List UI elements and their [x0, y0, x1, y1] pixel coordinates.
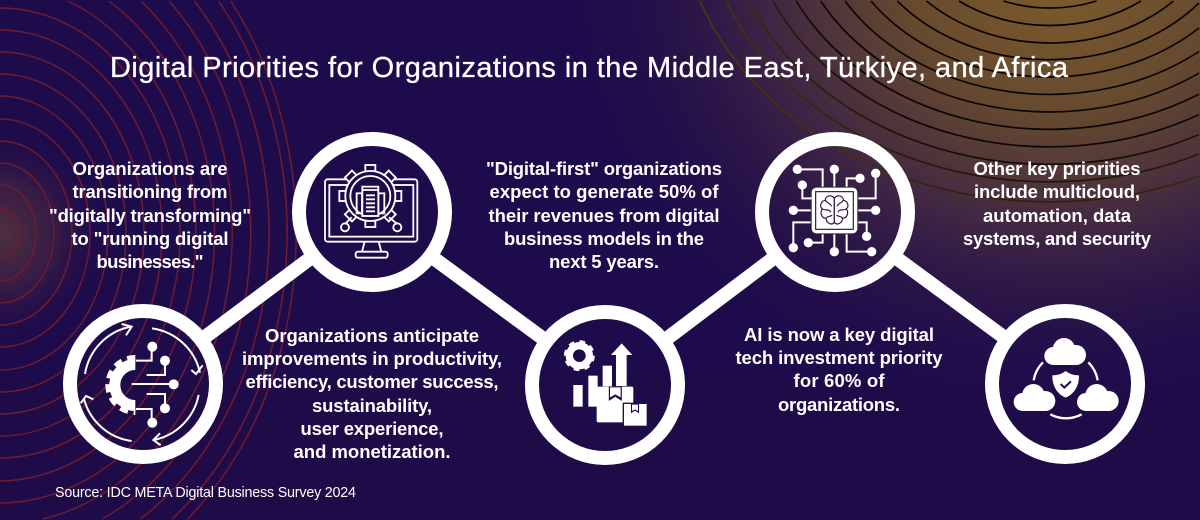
text: digital-first organizations: next 5 years.: [549, 251, 659, 272]
text: digital-first organizations: [486, 158, 722, 272]
icon: growth chart with gear and boxes: [565, 342, 648, 427]
text: AI investment priority: AI is now a key digital: [744, 324, 934, 345]
text: anticipated improvements: and monetization.: [294, 441, 450, 462]
source note: Source: IDC META Digital Business Survey 2024: [55, 485, 356, 501]
text: digital-first organizations: business models in the: [504, 228, 704, 249]
text: AI investment priority: tech investment priority: [736, 347, 943, 368]
text: AI investment priority: for 60% of: [794, 370, 885, 391]
text: anticipated improvements: sustainability,: [312, 395, 432, 416]
text: anticipated improvements: efficiency, customer success,: [246, 371, 498, 392]
text: anticipated improvements: improvements in productivity,: [242, 348, 502, 369]
icon: three clouds with security shield: [1014, 338, 1119, 418]
text: anticipated improvements: [242, 325, 502, 462]
text: other key priorities: automation, data: [983, 205, 1132, 226]
text: transition to digital businesses: "digitally transforming": [49, 205, 251, 226]
icon: gear with circuit and cycle arrows: [81, 324, 203, 445]
text: other key priorities: systems, and security: [963, 228, 1152, 249]
title: Digital Priorities for Organizations in the Middle East, Türkiye, and Africa: [110, 52, 1069, 84]
circle ring 3: [532, 312, 678, 458]
circle ring 1: [70, 311, 216, 457]
text: transition to digital businesses: businesses.": [96, 251, 204, 272]
text: other key priorities: [963, 158, 1152, 249]
text: transition to digital businesses: [49, 158, 251, 272]
text: anticipated improvements: Organizations anticipate: [265, 325, 479, 346]
text: transition to digital businesses: transitioning from: [72, 181, 228, 202]
text: other key priorities: Other key priorities: [974, 158, 1140, 179]
icon: AI chip with brain: [789, 165, 880, 256]
text: digital-first organizations: expect to generate 50% of: [490, 181, 719, 202]
text: other key priorities: include multicloud,: [974, 181, 1140, 202]
text: AI investment priority: organizations.: [778, 394, 900, 415]
circle ring 2: [299, 139, 445, 285]
text: digital-first organizations: "Digital-first" organizations: [486, 158, 722, 179]
text: transition to digital businesses: to "running digital: [72, 228, 228, 249]
text: AI investment priority: [736, 324, 943, 415]
circle ring 5: [992, 311, 1138, 457]
text: digital-first organizations: their revenues from digital: [488, 205, 720, 226]
text: anticipated improvements: user experience,: [300, 418, 444, 439]
connector lines: [203, 257, 1005, 340]
icon: monitor with gear: [325, 165, 417, 258]
circle ring 4: [762, 139, 908, 285]
text: transition to digital businesses: Organizations are: [72, 158, 228, 179]
